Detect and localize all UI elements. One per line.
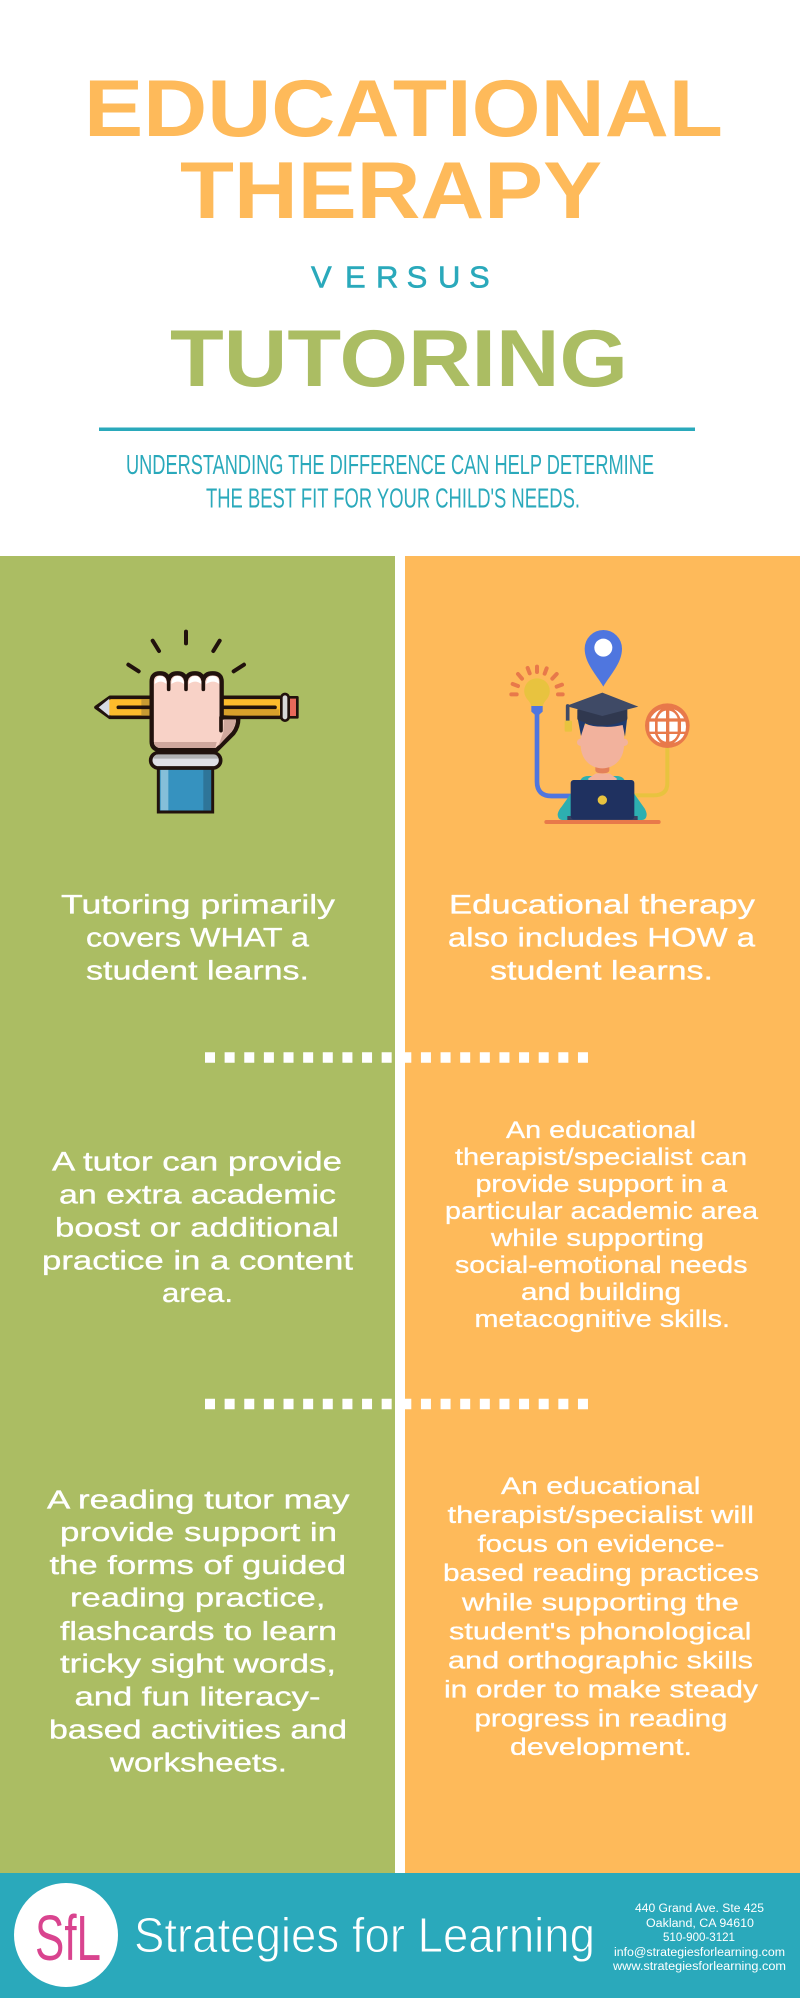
text: therapist support: particular academic area: [445, 1198, 759, 1225]
text: therapist support: [445, 1117, 759, 1333]
text: therapist reading focus: therapist/specialist will: [448, 1502, 754, 1529]
subtitle: THE BEST FIT FOR YOUR CHILD'S NEEDS.: [206, 482, 580, 514]
text: therapist reading focus: and orthographic skills: [448, 1647, 753, 1674]
text: tutoring covers what: covers WHAT a: [86, 922, 310, 952]
text: therapist support: An educational: [506, 1117, 696, 1144]
icon: graduate with laptop, bulb, pin and globe: [511, 630, 690, 824]
footer band: [0, 1873, 800, 1998]
text: therapy includes how: student learns.: [490, 955, 713, 985]
text: therapist reading focus: while supporting the: [461, 1589, 739, 1616]
contact details: 510-900-3121: [663, 1932, 735, 1944]
text: therapist reading focus: focus on evidence-: [478, 1531, 724, 1558]
logo: SfL circle: [14, 1883, 118, 1987]
text: therapist reading focus: progress in reading: [474, 1706, 728, 1733]
text: tutor academic boost: boost or additional: [55, 1212, 339, 1242]
brand name: Strategies for Learning: [134, 1909, 595, 1963]
contact details: Oakland, CA 94610: [646, 1918, 754, 1930]
logo: SfL circle: SfL: [35, 1902, 101, 1974]
panel: tutoring column: [0, 556, 395, 1873]
text: therapy includes how: [448, 890, 756, 985]
text: therapist reading focus: An educational: [501, 1473, 700, 1500]
text: therapist support: and building: [521, 1279, 681, 1306]
contact details: www.strategiesforlearning.com: [612, 1961, 786, 1973]
title: tutoring: TUTORING: [170, 314, 628, 404]
text: reading tutor: based activities and: [49, 1716, 347, 1744]
text: therapist reading focus: development.: [510, 1734, 692, 1761]
text: therapist support: while supporting: [490, 1225, 704, 1252]
text: reading tutor: the forms of guided: [50, 1552, 346, 1580]
text: reading tutor: and fun literacy-: [74, 1684, 320, 1712]
title: educational therapy: [84, 64, 723, 236]
panel: educational therapy column: [405, 556, 800, 1873]
text: reading tutor: A reading tutor may: [47, 1486, 350, 1514]
text: tutor academic boost: [42, 1147, 354, 1308]
text: therapy includes how: also includes HOW a: [448, 922, 756, 952]
text: reading tutor: provide support in: [60, 1519, 337, 1547]
title: educational therapy: THERAPY: [180, 146, 602, 236]
text: reading tutor: worksheets.: [109, 1749, 287, 1777]
text: therapy includes how: Educational therapy: [449, 890, 756, 920]
contact details: [612, 1903, 786, 1973]
text: therapist support: therapist/specialist can: [455, 1144, 747, 1171]
text: tutoring covers what: student learns.: [86, 955, 309, 985]
heading: versus: VERSUS: [311, 260, 490, 294]
text: therapist support: provide support in a: [476, 1171, 728, 1198]
text: therapist support: metacognitive skills.: [474, 1306, 730, 1333]
contact details: info@strategiesforlearning.com: [614, 1947, 785, 1959]
subtitle: [126, 449, 654, 514]
text: therapist support: social-emotional needs: [455, 1252, 748, 1279]
text: therapist reading focus: [443, 1473, 759, 1761]
text: therapist reading focus: student's phonological: [449, 1618, 752, 1645]
text: therapist reading focus: based reading practices: [443, 1560, 759, 1587]
text: tutor academic boost: A tutor can provide: [52, 1147, 342, 1177]
text: tutor academic boost: area.: [162, 1278, 233, 1308]
title: educational therapy: EDUCATIONAL: [84, 64, 723, 154]
text: tutor academic boost: practice in a content: [42, 1245, 354, 1275]
text: tutor academic boost: an extra academic: [59, 1180, 336, 1210]
text: reading tutor: [47, 1486, 350, 1777]
text: tutoring covers what: [61, 890, 336, 985]
text: tutoring covers what: Tutoring primarily: [61, 890, 336, 920]
text: reading tutor: reading practice,: [70, 1585, 326, 1613]
text: therapist reading focus: in order to make steady: [444, 1677, 759, 1704]
text: reading tutor: tricky sight words,: [60, 1651, 336, 1679]
contact details: 440 Grand Ave. Ste 425: [635, 1903, 764, 1915]
icon: hand gripping pencil: [96, 632, 297, 812]
text: reading tutor: flashcards to learn: [60, 1618, 337, 1646]
